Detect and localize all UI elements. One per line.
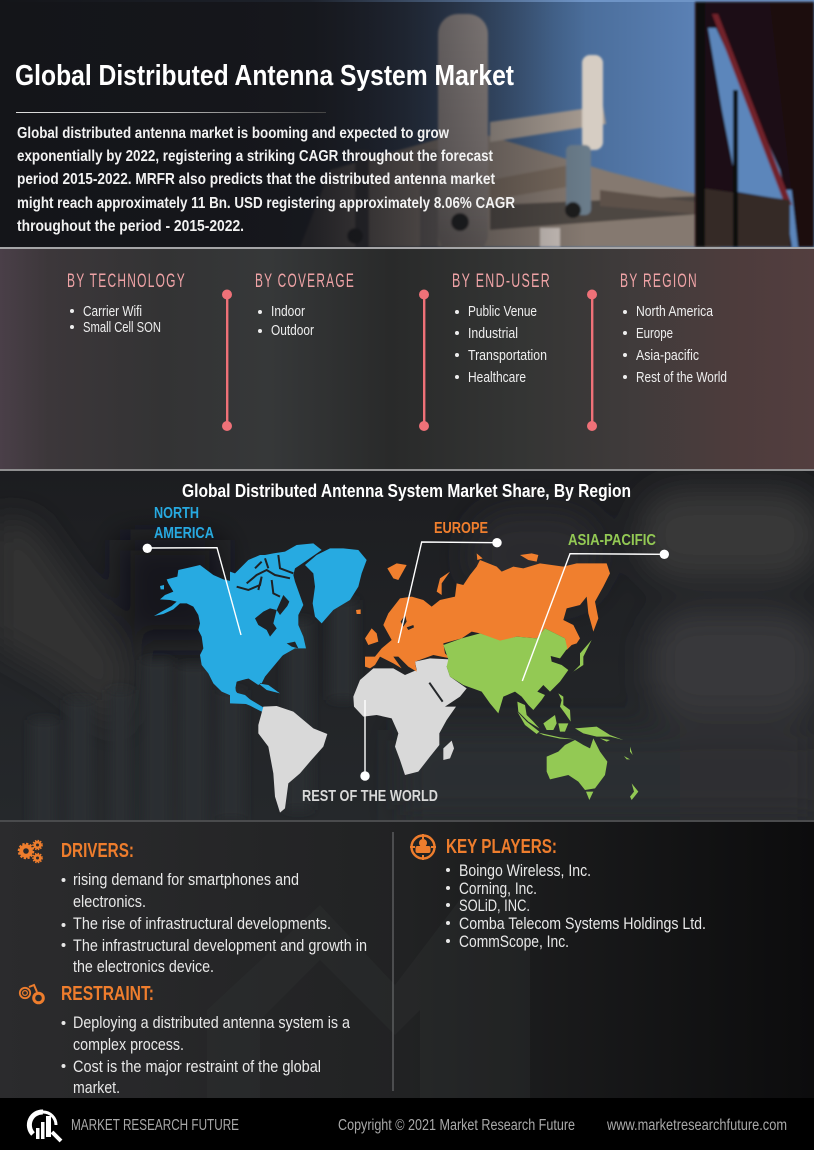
list: key players: Boingo Wireless, Inc. xyxy=(459,862,591,880)
panel: map background xyxy=(0,471,814,830)
panel: by coverage: BY COVERAGE xyxy=(255,271,355,292)
panel: by end-user: Industrial xyxy=(468,326,518,342)
list: restraint: Deploying a distributed antenna system is a xyxy=(73,1014,351,1032)
icon: market research future logo xyxy=(29,1112,61,1141)
label: north america: AMERICA xyxy=(154,525,214,542)
text block: introduction xyxy=(17,125,515,235)
chart title: Global Distributed Antenna System Market Share, By Region xyxy=(182,480,631,501)
panel: by end-user: Transportation xyxy=(468,348,547,364)
list: restraint: Cost is the major restraint of the global xyxy=(73,1058,321,1076)
list: drivers: rising demand for smartphones and xyxy=(73,871,299,889)
separator: technology and coverage xyxy=(222,290,232,431)
panel: by coverage: Outdoor xyxy=(271,323,314,339)
vertical divider xyxy=(392,832,394,1091)
footer: brand name: MARKET RESEARCH FUTURE xyxy=(71,1117,239,1134)
region: north america xyxy=(154,543,367,712)
label: europe: EUROPE xyxy=(434,520,488,537)
panel: by region: Rest of the World xyxy=(636,370,727,386)
icon: handcuffs xyxy=(20,985,43,1003)
panel: by region: Europe xyxy=(636,326,673,342)
world map xyxy=(154,543,638,813)
list: key players xyxy=(446,862,706,951)
heading: drivers: DRIVERS: xyxy=(61,840,134,862)
heading: restraint: RESTRAINT: xyxy=(61,983,154,1005)
label: asia-pacific: ASIA-PACIFIC xyxy=(568,532,656,549)
list: drivers xyxy=(62,871,367,976)
text block: introduction: exponentially by 2022, registering a striking CAGR throughout the forecast xyxy=(17,148,494,165)
text block: introduction: throughout the period - 2015-2022. xyxy=(17,218,244,235)
list: restraint xyxy=(62,1014,351,1097)
list: restraint: market. xyxy=(73,1079,120,1097)
list: key players: Corning, Inc. xyxy=(459,880,537,898)
region: south america xyxy=(258,706,327,813)
leader: rest of the world xyxy=(360,700,370,781)
label: north america: NORTH xyxy=(154,505,199,522)
list: drivers: electronics. xyxy=(73,893,146,911)
footer: copyright: Copyright © 2021 Market Research Future xyxy=(338,1117,575,1134)
title: Global Distributed Antenna System Market xyxy=(15,60,514,92)
panel: by technology: Carrier Wifi xyxy=(83,304,142,320)
panel: by end-user: Public Venue xyxy=(468,304,537,320)
list: drivers: The infrastructural development and growth in xyxy=(73,937,367,955)
panel: by technology: Small Cell SON xyxy=(83,320,161,336)
list: key players: SOLiD, INC. xyxy=(459,897,530,915)
panel: by region: BY REGION xyxy=(620,271,698,292)
region: africa and middle east xyxy=(353,658,467,775)
separator: coverage and end-user xyxy=(419,290,429,431)
leader: north america xyxy=(143,544,241,635)
panel: footer xyxy=(0,1098,814,1150)
panel: drivers and key players background xyxy=(0,822,814,1098)
region: asia-pacific xyxy=(443,628,638,800)
leader: europe xyxy=(398,538,502,643)
panel: by region xyxy=(620,271,727,386)
text block: introduction: might reach approximately 11 Bn. USD registering approximately 8.06% CAGR xyxy=(17,195,515,212)
panel: by coverage xyxy=(255,271,355,339)
panel: by end-user xyxy=(452,271,551,386)
list: restraint: complex process. xyxy=(73,1036,184,1054)
panel: by end-user: Healthcare xyxy=(468,370,526,386)
list: drivers: the electronics device. xyxy=(73,958,214,976)
panel: hero photo background xyxy=(0,0,814,254)
list: key players: Comba Telecom Systems Holdings Ltd. xyxy=(459,915,706,933)
list: key players: CommScope, Inc. xyxy=(459,933,569,951)
text block: introduction: period 2015-2022. MRFR also predicts that the distributed antenna market xyxy=(17,171,496,188)
region: europe and russia xyxy=(356,553,610,672)
icon: gears xyxy=(19,840,42,863)
list: drivers: The rise of infrastructural developments. xyxy=(73,915,331,933)
panel: segmentation background xyxy=(0,247,814,471)
heading: key players: KEY PLAYERS: xyxy=(446,836,557,858)
divider rule xyxy=(16,112,326,113)
panel: by end-user: BY END-USER xyxy=(452,271,551,292)
panel: by coverage: Indoor xyxy=(271,304,305,320)
panel: by region: North America xyxy=(636,304,714,320)
panel: by region: Asia-pacific xyxy=(636,348,699,364)
leader: asia-pacific xyxy=(522,550,669,681)
label: rest of the world: REST OF THE WORLD xyxy=(302,788,438,805)
panel: by technology xyxy=(67,271,186,336)
text block: introduction: Global distributed antenna market is booming and expected to grow xyxy=(17,125,449,142)
icon: target with person xyxy=(410,834,436,860)
separator: end-user and region xyxy=(587,290,597,431)
panel: by technology: BY TECHNOLOGY xyxy=(67,271,186,292)
label: north america xyxy=(154,505,214,542)
